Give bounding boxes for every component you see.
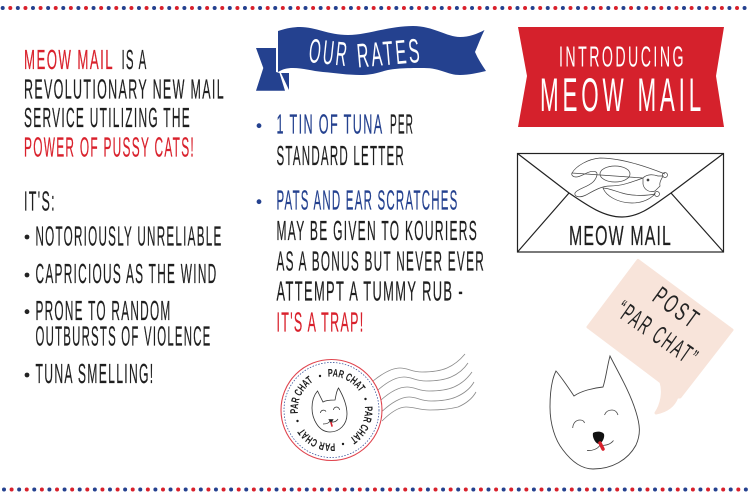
rate 2: ATTEMPT A TUMMY RUB - bbox=[276, 276, 464, 307]
panel: introduction text bbox=[24, 44, 225, 163]
banner: introducing meow mail bbox=[518, 27, 724, 127]
banner: our rates bbox=[256, 26, 486, 91]
intro line 1: MEOW MAIL bbox=[24, 44, 114, 75]
airmail dotted border: top bbox=[3, 6, 750, 10]
stamp circular text: PAR CHAT bbox=[297, 429, 335, 451]
panel: introduction text: SERVICE UTILIZING THE bbox=[24, 102, 191, 133]
cat face illustration bbox=[550, 356, 639, 469]
rate 2 bbox=[257, 184, 485, 338]
text: OUTBURSTS OF VIOLENCE bbox=[36, 321, 212, 352]
stamp circular text: PAR CHAT bbox=[351, 406, 373, 444]
cat head outline bbox=[550, 356, 639, 469]
banner: our rates: RATES bbox=[355, 32, 423, 75]
panel: introduction text: IS A bbox=[122, 44, 148, 75]
text: MAY BE GIVEN TO KOURIERS bbox=[276, 215, 478, 246]
envelope label: MEOW MAIL bbox=[569, 220, 672, 251]
panel: list of traits: TUNA SMELLING! bbox=[36, 358, 154, 389]
text: PATS AND EAR SCRATCHES bbox=[276, 184, 458, 215]
trait: prone to violence: PRONE TO RANDOM bbox=[36, 295, 172, 326]
text: NOTORIOUSLY UNRELIABLE bbox=[36, 221, 222, 252]
red ribbon bbox=[518, 27, 724, 127]
speech bubble bbox=[588, 260, 732, 413]
trait: tuna smelling bbox=[25, 358, 154, 389]
stamp cat face bbox=[312, 388, 347, 432]
trait: capricious bbox=[25, 258, 217, 289]
airmail dotted border: bottom bbox=[4, 488, 750, 492]
postmark wavy lines bbox=[373, 354, 476, 421]
bubble text bbox=[611, 281, 706, 373]
intro line 1 bbox=[24, 44, 148, 75]
cat tongue bbox=[600, 443, 603, 449]
text: REVOLUTIONARY NEW MAIL bbox=[24, 73, 225, 104]
cat nose bbox=[593, 432, 604, 444]
text: POWER OF PUSSY CATS! bbox=[24, 132, 195, 163]
envelope illustration bbox=[518, 154, 724, 252]
postmark stamp bbox=[280, 354, 476, 461]
rate 2: IT'S A TRAP! bbox=[276, 307, 364, 338]
panel: list of traits: IT'S: bbox=[24, 186, 56, 217]
stamp circular text bbox=[290, 369, 373, 451]
cat eyes bbox=[573, 410, 618, 428]
trait: notoriously unreliable bbox=[25, 221, 222, 252]
panel: list of traits bbox=[24, 186, 222, 389]
panel: rates list bbox=[257, 108, 485, 338]
cat mouth bbox=[587, 440, 614, 451]
bubble text: POST bbox=[647, 281, 706, 335]
envelope outline and flap bbox=[518, 154, 724, 252]
stamp rings bbox=[281, 360, 382, 460]
envelope sleeping cat bbox=[572, 158, 668, 203]
text: CAPRICIOUS AS THE WIND bbox=[36, 258, 218, 289]
bubble shape bbox=[588, 260, 732, 413]
stamp circular text: PAR CHAT bbox=[290, 376, 312, 414]
stamp circular text: PAR CHAT bbox=[328, 369, 366, 391]
banner ribbon body bbox=[278, 26, 486, 75]
rate 1 bbox=[257, 108, 414, 171]
panel: rates list: PER bbox=[390, 108, 414, 139]
banner ribbon tail bbox=[256, 48, 289, 91]
rate 1: 1 TIN OF TUNA bbox=[276, 108, 384, 139]
banner title: OUR bbox=[307, 32, 351, 74]
panel: rates list: STANDARD LETTER bbox=[276, 140, 405, 171]
trait: prone to violence bbox=[25, 295, 211, 352]
